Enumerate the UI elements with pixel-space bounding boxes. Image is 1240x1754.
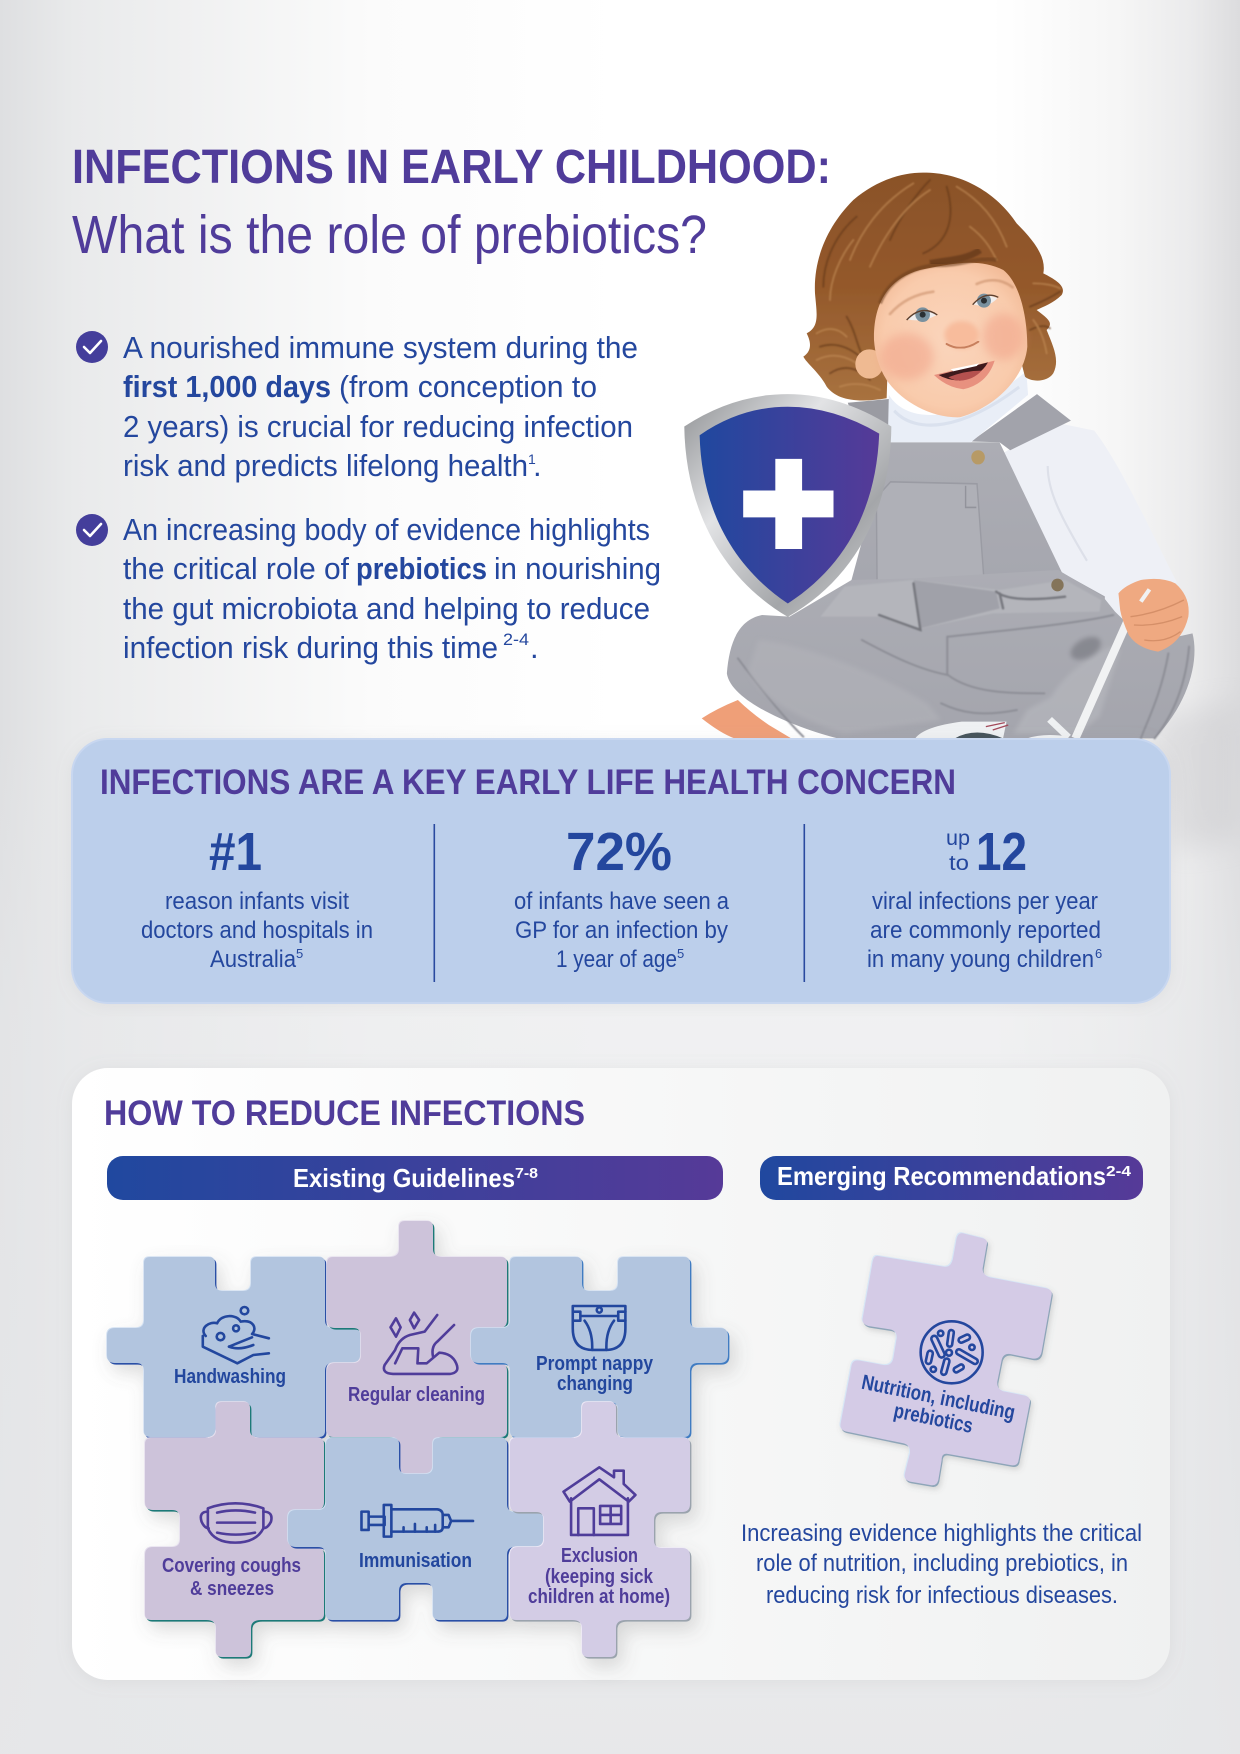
stat: up to 12: viral infections per year — [872, 888, 1098, 915]
bullet: first 1,000 days: (from conception to — [339, 369, 597, 404]
crease lines — [738, 615, 1189, 738]
bullet: first 1,000 days: 2 years) is crucial for reducing infection — [123, 409, 633, 444]
lower body — [702, 570, 1195, 738]
pill: existing guidelines — [107, 1156, 723, 1200]
panel: infections are a key early life health concern — [72, 739, 1170, 1003]
white sleeve — [1001, 423, 1177, 636]
icon: handwashing — [203, 1307, 269, 1363]
stat: up to 12: 6 — [1095, 946, 1102, 961]
puzzle piece: covering coughs and sneezes: & sneezes — [190, 1578, 274, 1600]
hair strands — [817, 180, 1060, 390]
fringe shadow — [880, 259, 997, 303]
text block: emerging evidence: Increasing evidence highlights the critical — [741, 1520, 1142, 1547]
puzzle: existing guidelines — [106, 1220, 729, 1659]
stat: up to 12: are commonly reported — [870, 917, 1101, 944]
stat: 72%: of infants have seen a — [514, 888, 730, 915]
stat: 72%: 5 — [677, 946, 684, 961]
trousers — [727, 570, 1195, 738]
icon: syringe — [361, 1505, 473, 1537]
head — [803, 173, 1063, 417]
hair silhouette — [803, 173, 1063, 401]
right hand — [1118, 579, 1189, 652]
stat: up to 12: in many young children — [867, 946, 1094, 973]
stat: up to 12: 12 — [976, 822, 1027, 882]
bullet: prebiotics: the critical role of — [123, 551, 349, 586]
icon: bacteria — [921, 1321, 983, 1383]
panel: how to reduce infections — [72, 1068, 1170, 1680]
text block: emerging evidence — [741, 1520, 1142, 1609]
puzzle piece: exclusion: Exclusion — [561, 1545, 638, 1567]
pill: existing guidelines: 7-8 — [515, 1165, 538, 1182]
bullet: first 1,000 days: 1 — [528, 451, 536, 467]
rear strap — [848, 399, 891, 442]
text block: emerging evidence: role of nutrition, including prebiotics, in — [756, 1550, 1128, 1577]
puzzle piece: immunisation — [287, 1437, 545, 1622]
bullet: first 1,000 days: first 1,000 days — [123, 369, 331, 404]
title: What is the role of prebiotics? — [72, 205, 707, 265]
text block: emerging evidence: reducing risk for infectious diseases. — [766, 1582, 1118, 1609]
toddler foot — [702, 700, 791, 738]
bullet: first 1,000 days — [76, 330, 638, 483]
stat: #1: reason infants visit — [165, 888, 349, 915]
puzzle piece: regular cleaning: Regular cleaning — [348, 1384, 485, 1406]
puzzle piece: prompt nappy changing — [470, 1256, 729, 1439]
panel heading: INFECTIONS ARE A KEY EARLY LIFE HEALTH CONCERN — [100, 763, 956, 802]
stat: up to 12: to — [949, 852, 969, 875]
puzzle piece: exclusion: children at home) — [528, 1586, 670, 1608]
title — [72, 141, 831, 265]
icon: check badge — [76, 514, 108, 546]
bullet: prebiotics: 2-4 — [503, 630, 529, 649]
pill: emerging recommendations: Emerging Recommendations — [777, 1161, 1106, 1191]
puzzle piece: regular cleaning — [326, 1220, 508, 1476]
stat: 72%: 1 year of age — [556, 946, 677, 973]
bullet: prebiotics: in nourishing — [494, 551, 661, 586]
puzzle piece: nutrition including prebiotics: prebiotics — [892, 1399, 975, 1438]
icon: face mask — [201, 1503, 271, 1543]
icon: medical shield — [684, 394, 891, 617]
pill: emerging recommendations — [760, 1156, 1143, 1200]
bullet: first 1,000 days: risk and predicts lifelong health — [123, 448, 528, 483]
stat: 72%: GP for an infection by — [515, 917, 728, 944]
pill: existing guidelines: Existing Guidelines — [293, 1163, 515, 1193]
button top — [971, 450, 985, 464]
stat: 72% — [514, 822, 730, 973]
puzzle piece: handwashing — [106, 1256, 362, 1439]
puzzle piece: handwashing: Handwashing — [174, 1366, 286, 1388]
front strap — [971, 394, 1071, 450]
fold shadow right — [1067, 632, 1105, 664]
knee light areas — [748, 640, 941, 733]
button lower — [1051, 579, 1064, 591]
puzzle piece: exclusion: (keeping sick — [545, 1566, 654, 1588]
puzzle piece: prompt nappy changing: Prompt nappy — [536, 1353, 654, 1375]
stat: #1: #1 — [209, 822, 262, 882]
waist folds — [821, 580, 1101, 628]
icon: check badge — [76, 331, 108, 363]
pill: emerging recommendations: 2-4 — [1106, 1163, 1132, 1180]
stat: up to 12: up — [946, 827, 970, 850]
bullet: prebiotics: An increasing body of evidence highlights — [123, 512, 650, 547]
turtleneck — [888, 371, 1028, 442]
bullet: prebiotics: the gut microbiota and helping to reduce — [123, 591, 650, 626]
background shadow behind child — [1150, 700, 1240, 850]
pocket — [876, 482, 984, 583]
overalls bib — [841, 442, 1105, 624]
stat: 72%: 72% — [566, 822, 672, 882]
bullet: prebiotics: infection risk during this time — [123, 630, 498, 665]
eyes — [890, 280, 1013, 322]
mouth — [934, 361, 995, 389]
puzzle piece: covering coughs and sneezes — [144, 1401, 325, 1659]
title: INFECTIONS IN EARLY CHILDHOOD: — [72, 141, 831, 194]
stat: #1 — [141, 822, 373, 973]
bullet: first 1,000 days: . — [533, 448, 542, 483]
shoe — [915, 722, 1007, 738]
puzzle piece: nutrition including prebiotics: Nutrition, including — [860, 1371, 1017, 1424]
cheeks — [880, 333, 933, 380]
shoelace — [1075, 618, 1129, 738]
stat: #1: 5 — [296, 946, 303, 961]
puzzle piece: nutrition including prebiotics — [839, 1232, 1053, 1487]
face — [874, 263, 1027, 417]
bullet: prebiotics: prebiotics — [356, 551, 487, 586]
ear — [855, 349, 883, 379]
photo: smiling toddler in grey overalls — [702, 173, 1240, 850]
puzzle piece: exclusion — [509, 1401, 691, 1659]
stat: #1: doctors and hospitals in — [141, 917, 373, 944]
icon: regular cleaning — [384, 1313, 457, 1374]
puzzle piece: prompt nappy changing: changing — [557, 1373, 633, 1395]
nose — [944, 321, 979, 349]
puzzle piece: covering coughs and sneezes: Covering coughs — [162, 1555, 301, 1577]
stat: #1: Australia — [210, 946, 297, 973]
upper body — [841, 371, 1177, 636]
icon: nappy — [573, 1306, 625, 1350]
bullet: first 1,000 days: A nourished immune system during the — [123, 330, 638, 365]
stat: up to 12 — [867, 822, 1102, 973]
bullet: prebiotics — [76, 512, 661, 665]
bullet: prebiotics: . — [530, 630, 539, 665]
icon: house — [564, 1467, 635, 1535]
puzzle piece: immunisation: Immunisation — [359, 1550, 472, 1572]
panel heading: HOW TO REDUCE INFECTIONS — [104, 1094, 585, 1133]
